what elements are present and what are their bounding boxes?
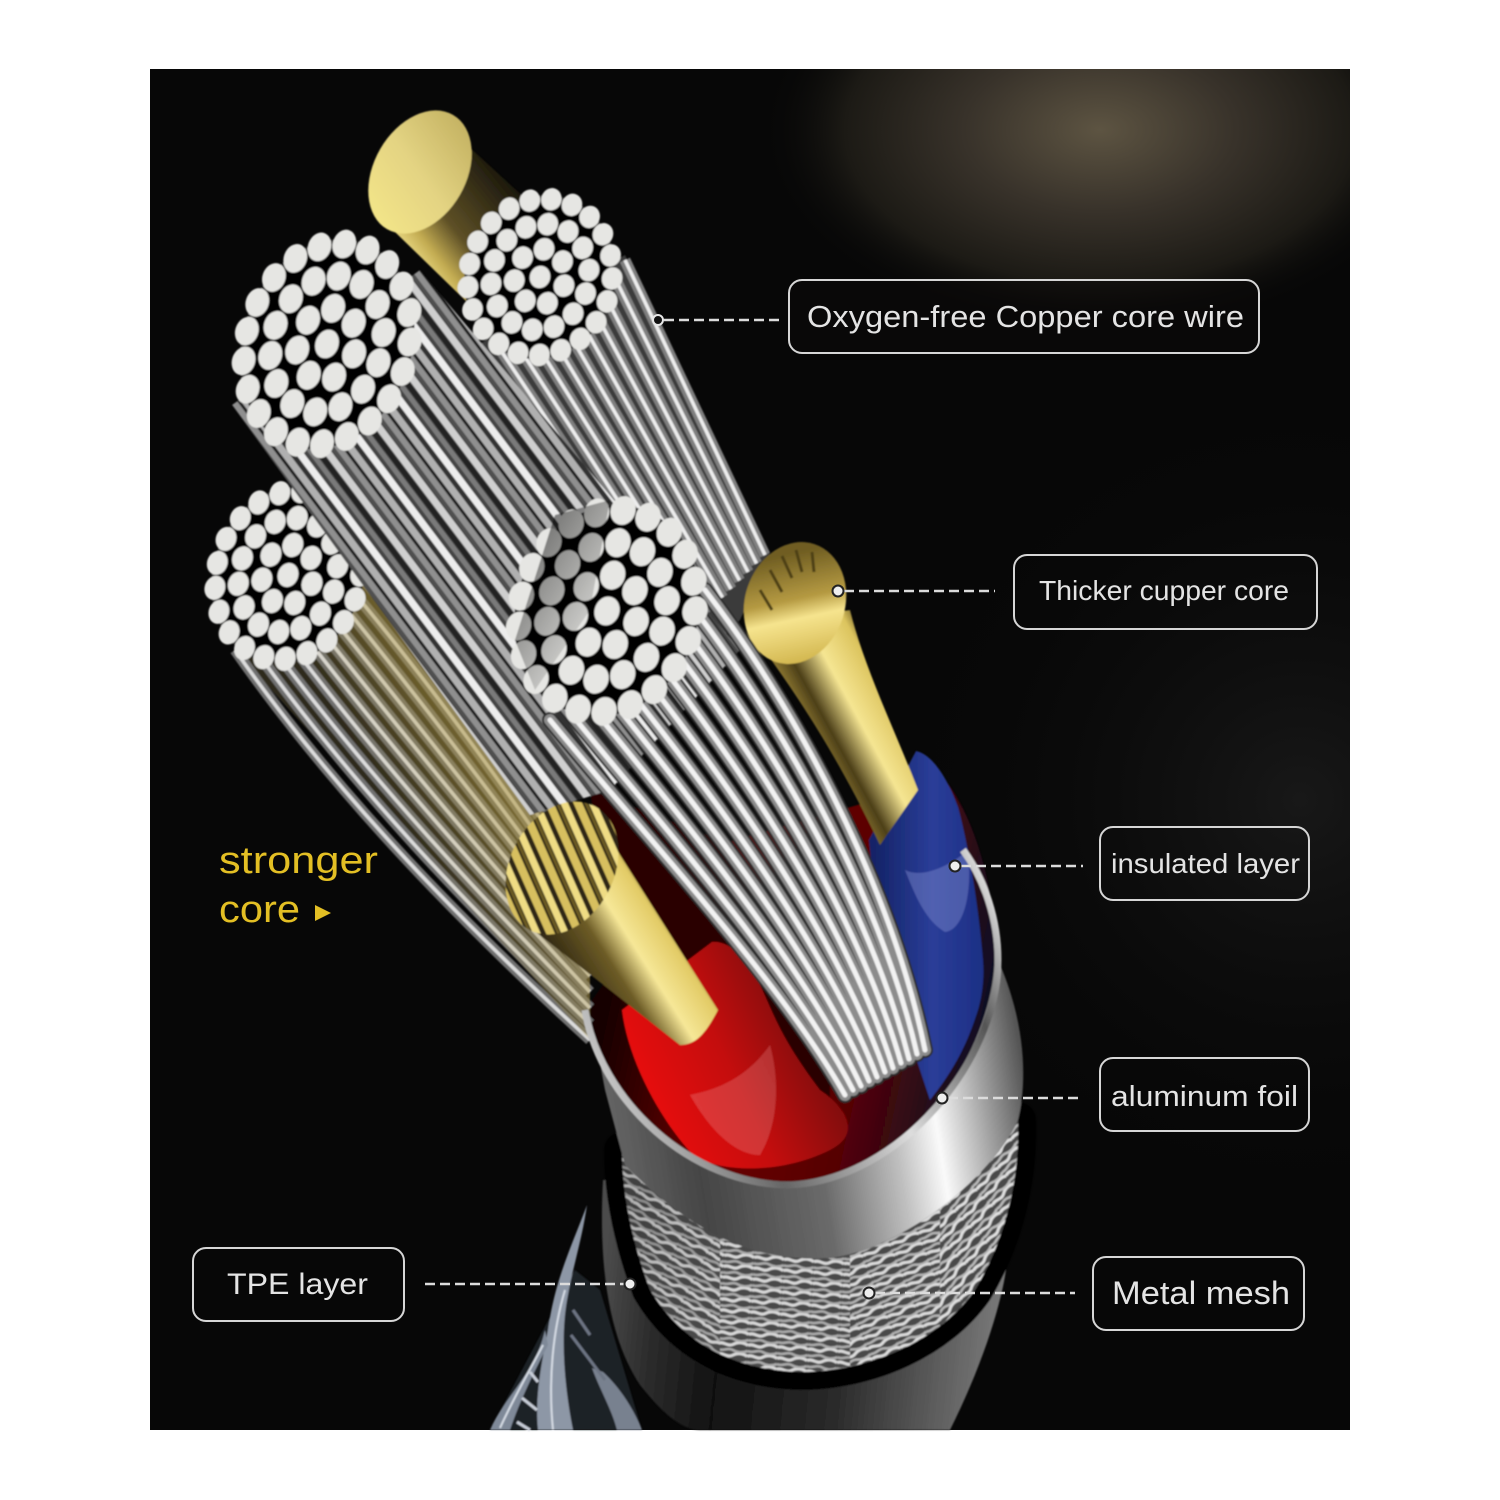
leader: metal mesh xyxy=(864,1288,1075,1298)
leader: TPE layer xyxy=(425,1278,636,1290)
illustration: cut-away cable xyxy=(179,92,1030,1430)
callout: oxygen-free copper core wire xyxy=(789,280,1259,353)
red insulation, rear xyxy=(590,790,830,1110)
callout: metal mesh xyxy=(1093,1257,1304,1330)
callout: insulated layer: insulated layer xyxy=(1111,848,1300,879)
metal mesh band xyxy=(615,1110,1030,1380)
callout: oxygen-free copper core wire: Oxygen-free Copper core wire xyxy=(807,299,1244,334)
strand bundle: center xyxy=(475,468,925,1095)
foil inner rim xyxy=(585,850,998,1185)
strand bundle: top right xyxy=(433,165,770,670)
leader: insulated layer xyxy=(950,860,1083,872)
callout: stronger core: stronger xyxy=(219,840,378,882)
icon: arrow marker xyxy=(315,905,331,921)
gold conductor, right xyxy=(728,529,918,845)
callout: insulated layer xyxy=(1100,827,1309,900)
callout: thicker cupper core: Thicker cupper core xyxy=(1039,575,1289,606)
callout: aluminum foil: aluminum foil xyxy=(1111,1081,1298,1113)
leader: aluminum foil xyxy=(936,1092,1082,1104)
red insulation sleeve xyxy=(622,942,848,1168)
callout: stronger core xyxy=(219,840,378,931)
strand bundle: upper left xyxy=(201,203,740,815)
leader: oxygen-free copper xyxy=(653,315,782,325)
callout: metal mesh: Metal mesh xyxy=(1112,1275,1290,1311)
gold conductor, front xyxy=(483,782,718,1045)
TPE outer jacket xyxy=(602,1180,1006,1430)
blue insulation sleeve xyxy=(869,751,983,1100)
strand bundle: lower left xyxy=(179,456,590,1040)
gold conductor, top xyxy=(347,92,527,305)
callout: TPE layer: TPE layer xyxy=(227,1268,368,1301)
callout: thicker cupper core xyxy=(1014,555,1317,629)
callout: stronger core: core xyxy=(219,889,300,931)
callout: aluminum foil xyxy=(1100,1058,1309,1131)
aluminum foil collar xyxy=(590,960,1023,1258)
callout: TPE layer xyxy=(193,1248,404,1321)
cable cavity xyxy=(585,780,995,1185)
braided shield strands xyxy=(490,1205,642,1430)
black band under mesh xyxy=(622,1120,1018,1372)
panel: dark background xyxy=(150,69,1350,1430)
leader: thicker core xyxy=(832,586,995,596)
